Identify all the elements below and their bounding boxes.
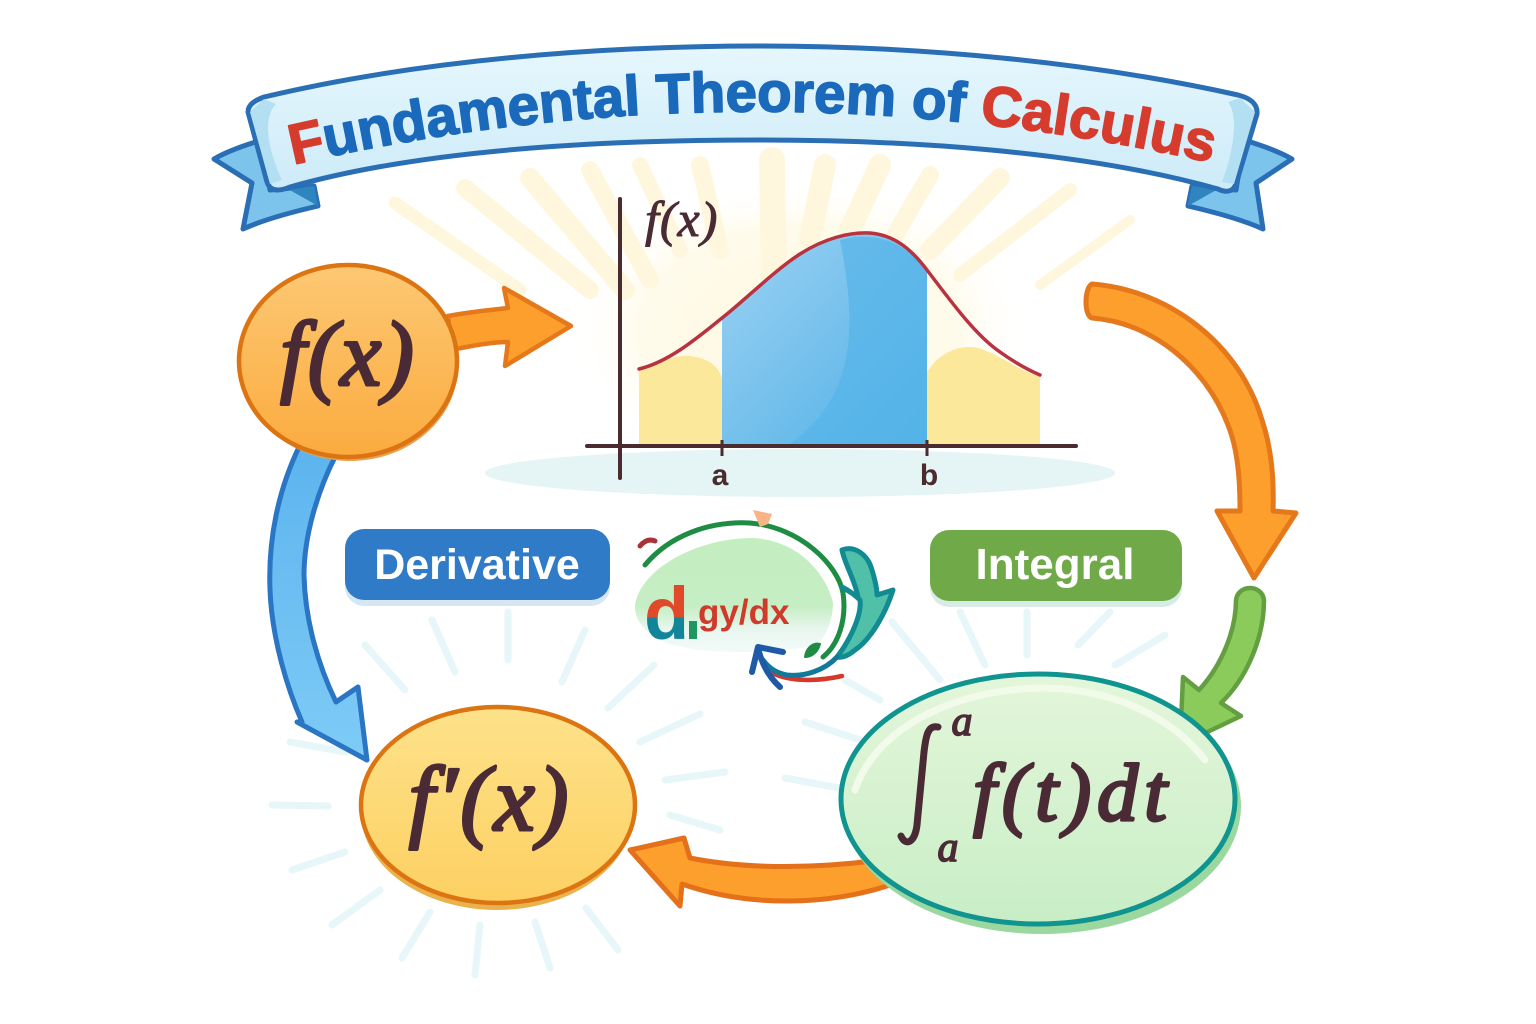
node: integral (841, 674, 1241, 934)
banner body (248, 46, 1257, 191)
banner right tail (1188, 140, 1292, 229)
green blob (635, 538, 833, 652)
blue integral region (722, 233, 927, 444)
red underline stroke (767, 670, 842, 680)
label a: a (712, 459, 729, 492)
chart label f(x): f(x) (645, 191, 718, 247)
green arc (645, 523, 844, 657)
node: f'(x) (361, 707, 635, 910)
cyan rays around f'(x) (272, 612, 725, 975)
label b: b (920, 459, 938, 492)
left yellow region (639, 356, 722, 444)
orange splash (753, 510, 772, 527)
arrow: integral to f'(x), orange (630, 838, 890, 906)
glow behind chart (570, 180, 1030, 480)
arrow: green into integral (1180, 588, 1264, 745)
banner end shading (250, 98, 1255, 184)
arrow: f(x) to chart (448, 288, 571, 366)
cyan rays around integral (785, 612, 1165, 790)
ground shadow under chart (485, 449, 1115, 497)
title banner (212, 44, 1294, 232)
green dot (805, 644, 820, 657)
title text: Fundamental Theorem of Calculus (288, 70, 1214, 164)
red curve f(x) (639, 233, 1040, 375)
blue return arrow (752, 647, 783, 687)
x axis (587, 444, 1076, 448)
lower limit a: a (938, 825, 958, 871)
icon: dy/dx cycle (635, 510, 893, 687)
label: Integral: Integral (976, 540, 1134, 589)
upper limit a: a (952, 699, 972, 745)
inner highlight (855, 688, 1205, 790)
gy/dx text: gy/dx (698, 593, 790, 632)
right yellow region (927, 347, 1040, 444)
sunburst rays behind chart (395, 160, 1130, 290)
chart: area under curve (587, 191, 1076, 492)
arrow: f(x) to f'(x), blue (270, 445, 367, 760)
arrow: chart to integral, orange (1086, 284, 1296, 578)
red tick (640, 540, 655, 546)
node: f'(x): f′(x) (409, 748, 571, 850)
teal return stroke (763, 657, 837, 675)
tick a (722, 440, 927, 456)
banner left tail (214, 140, 318, 229)
label: Integral (930, 530, 1182, 607)
small stem (689, 621, 697, 639)
node: f(x) (239, 265, 458, 461)
y axis (618, 199, 622, 478)
integrand: f(t)dt (973, 747, 1173, 838)
d glyph: d (644, 572, 689, 655)
integral sign (901, 727, 938, 842)
label: Derivative (345, 529, 610, 606)
node: f(x): f(x) (280, 303, 416, 405)
label: Derivative: Derivative (374, 541, 580, 589)
teal arrow (837, 549, 893, 657)
